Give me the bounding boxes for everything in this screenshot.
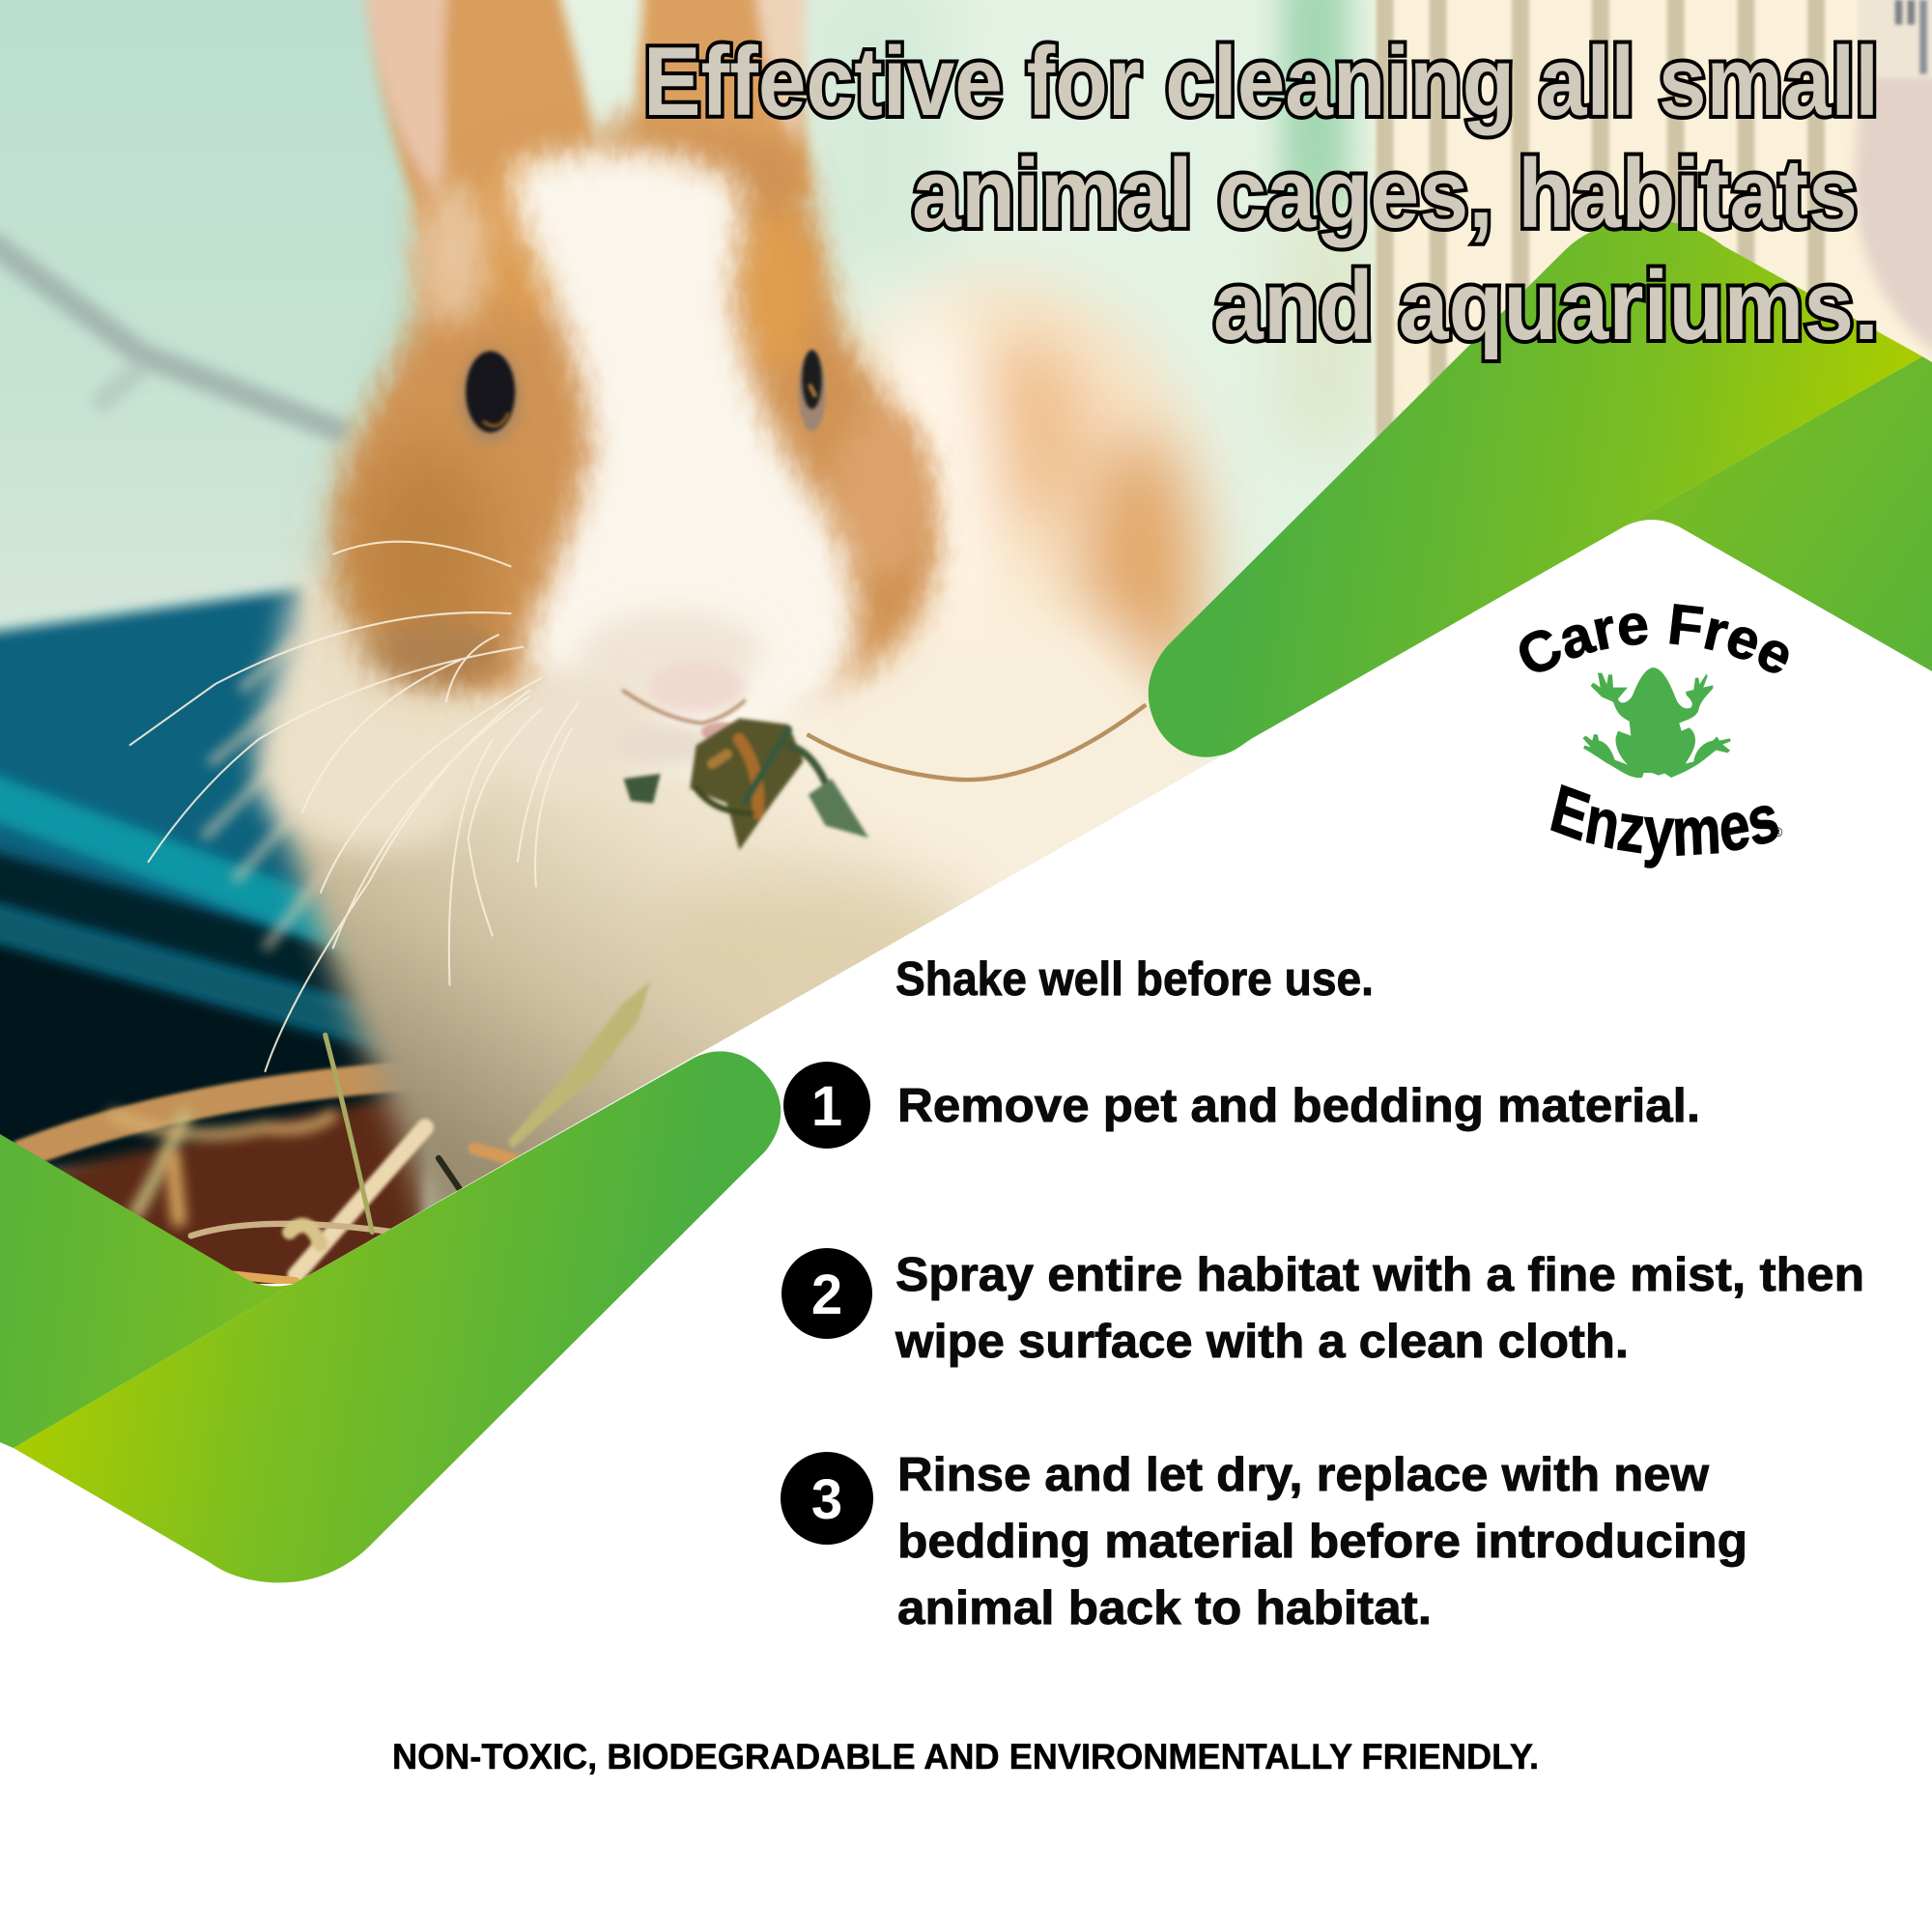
title: and aquariums.: [1213, 252, 1879, 360]
fringe of white fur over the tub: [203, 640, 332, 949]
green band: back left: [0, 1134, 294, 1448]
left eye: [460, 350, 522, 443]
whisker pad: [493, 666, 666, 788]
straw in the bowl: [113, 1035, 529, 1282]
step 2 text: Spray entire habitat with a fine mist, then: [895, 1249, 1864, 1301]
wall tint near rabbit right: [811, 0, 945, 267]
tub lower dark: [0, 936, 419, 1171]
cheek fringe: [260, 573, 529, 850]
bowl rim: [18, 1074, 431, 1155]
photo background: mint wall: [427, 0, 1377, 1208]
golden fur right brow: [742, 210, 815, 370]
registered mark: ®: [1773, 824, 1783, 839]
lower jaw: [616, 725, 715, 765]
hay in mouth: [623, 719, 868, 850]
green band: front left: [14, 1051, 781, 1582]
lower cheek brown: [370, 622, 505, 684]
step 3 text: [897, 1449, 1747, 1634]
green band: back right: [1623, 356, 1932, 671]
chest lower right tint: [653, 875, 974, 1023]
left wall shading: [0, 0, 431, 653]
branch in background: [0, 241, 348, 434]
water bottle: [1855, 0, 1932, 357]
mouth: [622, 690, 746, 724]
step 2 text: wipe surface with a clean cloth.: [895, 1316, 1629, 1368]
logo: Care Free Enzymes: [1520, 604, 1789, 868]
muzzle tint: [579, 610, 764, 696]
darker cheek fur: [352, 443, 499, 666]
instruction: shake well: Shake well before use.: [895, 953, 1374, 1006]
chest: [245, 685, 1213, 1220]
step 3 badge: [781, 1452, 873, 1545]
step 1 badge: [783, 1062, 870, 1149]
left ear: [363, 0, 598, 234]
right ear: [637, 0, 813, 197]
head fur: [335, 111, 937, 715]
nose: [647, 661, 746, 715]
straw stalk at right: [508, 980, 650, 1149]
step 3 text: bedding material before introducing: [897, 1516, 1747, 1568]
cage bars: [1385, 0, 1816, 443]
step 1 text: Remove pet and bedding material.: [897, 1080, 1700, 1132]
golden fur between ears: [462, 148, 585, 321]
step 2 badge: 2: [811, 1264, 842, 1326]
footer statement: NON-TOXIC, BIODEGRADABLE AND ENVIRONMENTALLY FRIENDLY.: [392, 1737, 1539, 1776]
cream area behind the bars: [1393, 0, 1932, 420]
tub rim band: [0, 791, 376, 939]
bowl interior: [50, 1094, 432, 1284]
green band: front right: [1149, 219, 1922, 757]
step 3 text: animal back to habitat.: [897, 1582, 1432, 1634]
title: animal cages, habitats: [912, 140, 1858, 248]
logo text: Enzymes: Enzymes: [1550, 784, 1778, 868]
step 2 text: [895, 1249, 1864, 1368]
green wall glow: [1282, 0, 1350, 210]
icon: green frog: [1582, 668, 1731, 778]
title: [643, 28, 1879, 360]
step 2 badge: [781, 1248, 872, 1339]
lip: [701, 722, 741, 742]
step 3 text: Rinse and let dry, replace with new: [897, 1449, 1710, 1501]
stem from mouth: [807, 705, 1146, 780]
step 3 badge: 3: [811, 1468, 842, 1531]
right eye: [799, 350, 826, 431]
pale left temple: [419, 179, 488, 327]
rabbit head: [335, 111, 937, 762]
photo: rabbit eating hay in its cage: [0, 0, 1932, 1355]
whiskers: [129, 542, 579, 1072]
olive wall glow: [1282, 210, 1368, 443]
white blaze and muzzle: [511, 150, 856, 762]
logo text: Care Free: Care Free: [1520, 604, 1789, 673]
blue tub: [0, 589, 425, 1171]
tub shadow band: [0, 872, 370, 980]
pale right cheek: [832, 407, 930, 579]
tub lower band: [0, 918, 394, 1033]
back of the rabbit: [860, 261, 1244, 713]
step 1 badge: 1: [811, 1075, 842, 1138]
